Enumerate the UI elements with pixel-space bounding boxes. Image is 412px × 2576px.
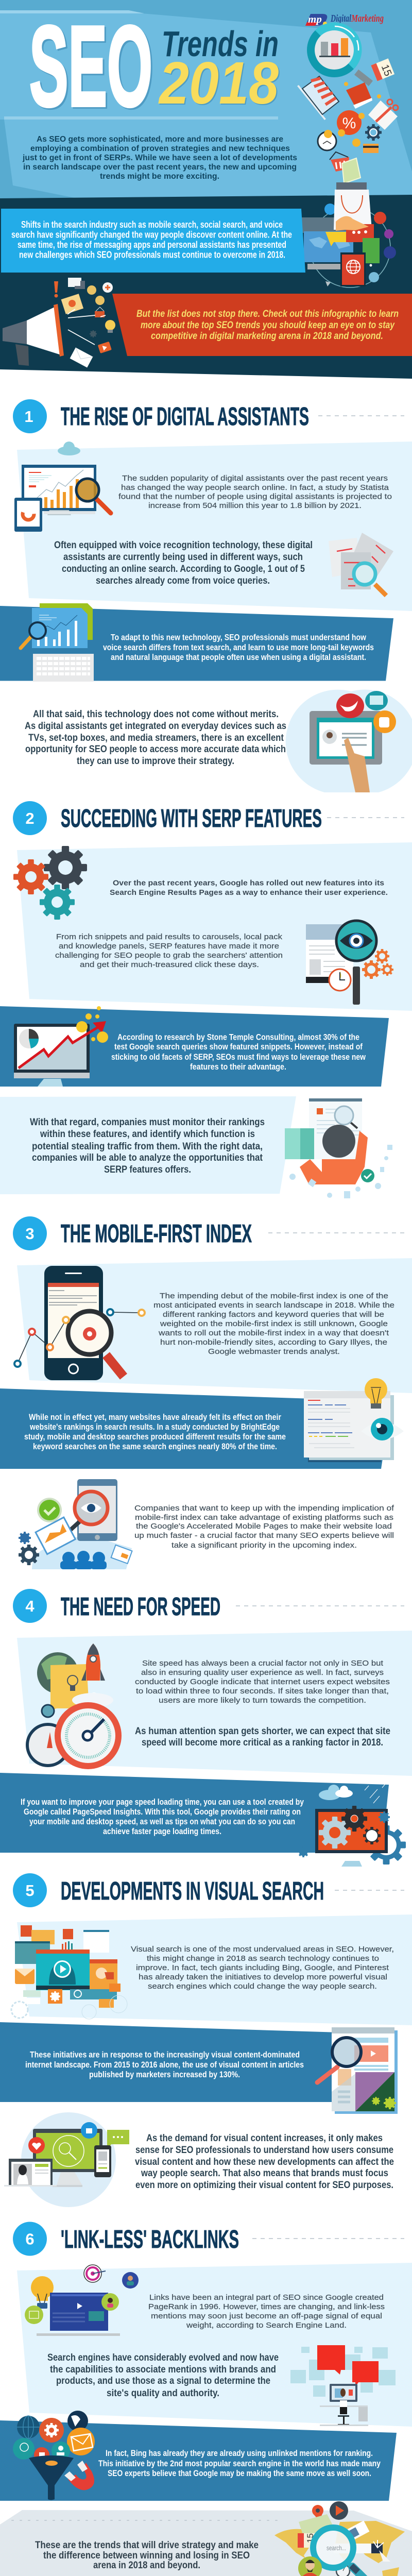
- icon: cloud: [58, 442, 80, 455]
- icon: coins: [87, 285, 105, 305]
- text: voice recognition: assistants are currently being used in different ways, such: [63, 552, 303, 563]
- text: AMP: mobile-first index can take advantage of existing platforms such as: [135, 1513, 393, 1522]
- text: research: According to research by Stone Temple Consulting, almost 30% of the: [117, 1032, 359, 1042]
- icon: coins: [338, 82, 381, 147]
- icon: exclamation: [54, 281, 58, 298]
- icon: red book: [346, 82, 372, 107]
- callout: red teaser: [112, 294, 412, 356]
- band: Bing: [0, 2420, 397, 2501]
- icon: calendar: 15: [379, 63, 393, 78]
- text: rankings effect: keyword searches on the same search engines nearly 80% of the time.: [33, 1442, 277, 1451]
- panel: light blue: [17, 1631, 412, 1776]
- icon: devices with green search: [4, 2112, 129, 2207]
- text: impending debut: most anticipated events in search landscape in 2018. While the: [153, 1301, 394, 1310]
- icon: percent badge: [337, 110, 362, 135]
- icon: analytics monitor: [22, 465, 96, 515]
- icon: monitor with gears: [298, 1782, 406, 1867]
- icon: calendar: [371, 58, 394, 81]
- text: site speed: users are more likely to turn towards the competition.: [159, 1696, 366, 1705]
- band: rankings effect: [0, 1388, 391, 1469]
- title: [29, 3, 279, 130]
- icon: gears: [13, 846, 87, 920]
- text: rankings effect: [24, 1412, 286, 1451]
- text: search engines evolved: [47, 2352, 279, 2399]
- text: initiatives: internet landscape. From 2015 to 2016 alone, the use of visual content in articles: [25, 2060, 304, 2070]
- text: Bing: [98, 2448, 381, 2478]
- text: links: mentions may soon just become an off-page signal of equal: [151, 2312, 382, 2320]
- icon: monitor: [302, 217, 353, 269]
- text: pagespeed: your mobile and desktop speed, as well as tips on what you can do so you can: [29, 1817, 295, 1826]
- text: links: PageRank in 1996. However, times are changing, and link-less: [148, 2302, 385, 2311]
- icon: phone with magnifier and graph: [14, 1266, 145, 1380]
- icon: settings gear: [365, 124, 382, 141]
- text: demand: As the demand for visual content increases, it only makes: [146, 2133, 383, 2144]
- badge 6: 6: [25, 2230, 35, 2248]
- icon: shopping basket: [330, 152, 349, 172]
- text: merits: they can use to improve their strategy.: [77, 756, 234, 767]
- text: these are the trends: These are the trends that will drive strategy and make: [35, 2540, 259, 2551]
- text: popularity: found that the number of people using digital assistants is projected to: [118, 493, 392, 501]
- badge 1: [13, 399, 47, 433]
- text: impending debut: wants to roll out the mobile-first index in a way that doesn't: [158, 1329, 389, 1337]
- icon: megaphone: [3, 304, 64, 366]
- text: AMP: the Google's Accelerated Mobile Pages to make their website load: [136, 1522, 392, 1531]
- panel: shifts in search: [1, 209, 305, 273]
- text: site speed: [135, 1659, 390, 1705]
- icon: folded map: [299, 2514, 334, 2545]
- text: voice recognition: conducting an online search. According to Google, 1 out of 5: [62, 564, 305, 574]
- heading 3: THE MOBILE-FIRST INDEX: [61, 1220, 252, 1248]
- text: research: [111, 1032, 366, 1072]
- panel: light blue: [17, 2263, 412, 2427]
- icon: tablet pie chart: [14, 498, 42, 532]
- heading 6: 'LINK-LESS' BACKLINKS: [61, 2226, 239, 2253]
- text: impending debut: different ranking factors and keyword queries that will be: [163, 1310, 384, 1319]
- icon: credit card: [363, 144, 379, 153]
- text: initiatives: [25, 2049, 304, 2079]
- badge 4: 4: [25, 1597, 35, 1615]
- icon: social circles: [324, 204, 396, 286]
- badge 1: 1: [24, 408, 33, 426]
- text: demand: [135, 2133, 394, 2191]
- icon: play button: [330, 2501, 348, 2520]
- icon: magnifier with bar chart: [307, 22, 371, 83]
- text: monitor rankings: within these features, and identify which function is: [40, 1129, 255, 1140]
- icon: logo top: mp: [308, 13, 322, 25]
- panel: closing grey: [0, 2510, 412, 2576]
- text: rankings effect: While not in effect yet, many websites have already felt its effect on their: [29, 1412, 281, 1422]
- icon: photo: [61, 294, 83, 314]
- text: rich snippets: challenging for SEO people to grab the searchers' attention: [55, 951, 283, 960]
- panel: shifts in search: search have significantly changed the way people discover content online. At the: [11, 230, 292, 240]
- badge 5: 5: [25, 1882, 35, 1900]
- text: rankings effect: study, mobile and desktop searches produced different results for the same: [24, 1432, 286, 1442]
- icon: tablet with hand: [286, 689, 412, 792]
- intro text: trends might be more exciting.: [100, 172, 219, 181]
- text: merits: opportunity for SEO people to access more accurate data which: [25, 744, 286, 755]
- icon: rocket and speedometer: [27, 1643, 118, 1766]
- band: research: [0, 1006, 389, 1087]
- text: AMP: Companies that want to keep up with the impending implication of: [134, 1504, 394, 1513]
- icon: clock: [318, 130, 336, 150]
- icon: map pin: [312, 2505, 323, 2521]
- text: site speed: to load within three to four seconds. If sites take longer than that,: [136, 1687, 389, 1696]
- panel: light blue: [17, 1914, 412, 2025]
- text: these are the trends: [35, 2540, 259, 2571]
- text: visual search: search engines which could change the way people search.: [148, 1982, 377, 1991]
- badge 2: 2: [25, 809, 35, 827]
- icon: book pages: [353, 98, 372, 109]
- band: initiatives: [0, 2022, 340, 2102]
- icon: documents with magnifier: [329, 533, 393, 596]
- text: rankings effect: website's rankings in search results. In a study conducted by BrightEdge: [29, 1422, 280, 1432]
- text: attention span: speed will become more critical as a ranking factor in 2018.: [142, 1737, 383, 1748]
- icon: percent badge: %: [342, 115, 356, 132]
- section 6: link-less backlinks: [0, 2222, 412, 2501]
- icon: person reading with magnifier: [285, 1098, 392, 1198]
- panel: shifts in search: Shifts in the search industry such as mobile search, social search, and voice: [21, 219, 283, 230]
- icon: calendar: [298, 2533, 317, 2548]
- title word SEO: SEO: [29, 3, 152, 130]
- text: research: test Google search queries show featured snippets. However, instead of: [114, 1042, 363, 1052]
- icon: monitor with growth arrow: [14, 1006, 108, 1087]
- icon: magnifier: [76, 479, 111, 513]
- badge 3: 3: [25, 1225, 35, 1243]
- icon: devices and shopping bag: [302, 182, 396, 287]
- text: monitor rankings: companies will be able to analyze the opportunities that: [32, 1153, 263, 1163]
- text: pagespeed: [21, 1797, 304, 1836]
- band: pagespeed: [0, 1773, 389, 1853]
- text: site speed: Site speed has always been a crucial factor not only in SEO but: [142, 1659, 384, 1668]
- header background: [0, 0, 412, 206]
- text: impending debut: weighted on the mobile-first index is still unknown, Google: [160, 1319, 388, 1328]
- text: search engines evolved: Search engines have considerably evolved and now have: [47, 2352, 279, 2363]
- icon: red speech bubble: [346, 224, 374, 246]
- text: popularity: increase from 504 million this year to 1.8 billion by 2021.: [148, 501, 362, 510]
- text: merits: TVs, set-top boxes, and media streamers, there is an excellent: [28, 733, 284, 743]
- icon: large magnifier: search...: [327, 2544, 346, 2552]
- intro text: just to get in front of SERPs. While we have seen a lot of developments: [22, 154, 297, 162]
- dark intro band: [0, 195, 412, 379]
- text: links: [148, 2293, 385, 2330]
- icon: card: [347, 2520, 369, 2541]
- text: pagespeed: If you want to improve your page speed loading time, you can use a tool created by: [21, 1797, 304, 1807]
- text: research: features to their advantage.: [190, 1062, 286, 1072]
- icon: phone eye and users: [19, 1479, 132, 1569]
- icon: report chart and keyboard: [21, 603, 94, 682]
- panel: light blue: [17, 442, 412, 611]
- icon: large magnifier: [313, 2528, 382, 2576]
- text: search engines evolved: products, and use those as a signal to determine the: [56, 2376, 270, 2386]
- badge 3: [13, 1216, 47, 1250]
- icon: results page with bulb and eye: [304, 1378, 404, 1462]
- section 2: SERP features: [0, 801, 412, 1198]
- text: links: weight, according to Search Engine Land.: [186, 2321, 347, 2330]
- text: attention span: [135, 1726, 390, 1748]
- text: pagespeed: achieve faster page loading times.: [103, 1826, 221, 1836]
- text: merits: As digital assistants get integrated on everyday devices such as: [25, 721, 286, 732]
- text: new features: [110, 879, 388, 897]
- text: popularity: has changed the way people search online. In fact, a study by Statista: [121, 483, 389, 492]
- text: these are the trends: the difference between winning and losing in SEO: [43, 2550, 250, 2561]
- text: site speed: conducted by Google indicate that internet users expect websites: [135, 1677, 390, 1686]
- text: adapt: [103, 633, 374, 662]
- text: monitor rankings: With that regard, companies must monitor their rankings: [30, 1117, 265, 1128]
- text: initiatives: published by marketers increased by 130%.: [89, 2070, 240, 2079]
- section 1: digital assistants: [0, 399, 412, 792]
- icon: person at desk with speech bubbles: [290, 2345, 396, 2426]
- text: search engines evolved: site's quality and authority.: [107, 2388, 219, 2399]
- panel: monitor rankings: [0, 1096, 296, 1194]
- text: adapt: To adapt to this new technology, SEO professionals must understand how: [111, 633, 367, 642]
- section 4: need for speed: [0, 1589, 412, 1867]
- text: rich snippets: and knowledge panels, SERP features have made it more: [59, 942, 279, 951]
- section 3: mobile-first index: [0, 1216, 412, 1569]
- intro text: As SEO gets more sophisticated, more and more businesses are: [37, 135, 283, 144]
- text: monitor rankings: [30, 1117, 265, 1175]
- title year 2018: 2018: [158, 49, 279, 116]
- intro text: employing a combination of proven strategies and new techniques: [30, 144, 290, 153]
- text: merits: All that said, this technology does not come without merits.: [33, 709, 279, 720]
- badge 4: [13, 1589, 47, 1623]
- text: voice recognition: [54, 540, 313, 586]
- text: new features: Search Engine Results Pages as a way to enhance their user experience.: [110, 888, 388, 897]
- badge 6: [13, 2222, 47, 2256]
- icon: hand: [336, 216, 369, 231]
- icon: page eye magnifier: [306, 921, 393, 1005]
- panel: light blue: [17, 1258, 412, 1393]
- icon: shopping bag: [334, 182, 372, 230]
- text: voice recognition: searches already come from voice queries.: [96, 575, 270, 586]
- text: impending debut: hurt non-mobile-friendly sites, according to Gary Illyes, the: [160, 1338, 387, 1347]
- icon: man avatar: [298, 2556, 322, 2576]
- icon: yellow speech bubble: [325, 232, 347, 246]
- intro text: [22, 135, 297, 181]
- icon: basket: [95, 307, 105, 317]
- icon: tablet storefront: [297, 76, 339, 120]
- text: popularity: [118, 474, 392, 510]
- panel: shifts in search: new challenges which SEO professionals must continue to overcome in 2018.: [19, 249, 285, 260]
- icon: note bubble: [68, 278, 85, 289]
- icon: content windows collage: [11, 1925, 127, 2019]
- icon: logo top: [305, 13, 384, 26]
- icon: laptop with bulb and target: [25, 2265, 139, 2336]
- text: impending debut: The impending debut of the mobile-first index is one of the: [160, 1292, 388, 1300]
- icon: logo top: Digital: [330, 13, 351, 24]
- text: rich snippets: and get their much-treasured click these days.: [80, 960, 259, 969]
- icon: video card: [98, 342, 112, 353]
- heading 4: THE NEED FOR SPEED: [61, 1593, 220, 1621]
- text: monitor rankings: potential stealing traffic from them. With the right data,: [32, 1141, 263, 1152]
- icon: world map with search magnifier: [274, 2501, 405, 2576]
- icon: funnel and magnet: [13, 2411, 95, 2500]
- text: AMP: [134, 1504, 394, 1550]
- text: impending debut: [153, 1292, 394, 1356]
- text: impending debut: Google webmaster trends analyst.: [208, 1347, 340, 1356]
- title words Trends in: Trends in: [162, 24, 279, 64]
- icon: clock: [336, 2564, 350, 2576]
- icon: megaphone cluster: [3, 278, 115, 368]
- icon: envelope: [70, 347, 93, 368]
- text: visual search: [131, 1945, 394, 1991]
- text: links: Links have been an integral part of SEO since Google created: [149, 2293, 384, 2302]
- text: visual search: improve. In fact, tech giants including Bing, Google, and Pinterest: [136, 1963, 389, 1972]
- icon: search bar: [334, 2540, 390, 2562]
- section 5: visual search: [0, 1873, 412, 2207]
- icon: red tablet with globe: [340, 252, 366, 286]
- icon: web page with magnifier: [317, 2027, 398, 2114]
- text: rich snippets: [55, 933, 283, 969]
- text: popularity: The sudden popularity of digital assistants over the past recent years: [122, 474, 388, 483]
- icon: green phone: [363, 238, 380, 267]
- icon: bulb: [105, 320, 115, 333]
- icon: plus badge: [102, 282, 113, 293]
- icon: calendar: 15: [305, 2533, 315, 2543]
- badge 5: [13, 1873, 47, 1907]
- text: visual search: this might change in 2018 as search technology continues to: [147, 1954, 379, 1963]
- text: search engines evolved: the capabilities to associate mentions with brands and: [50, 2364, 276, 2375]
- text: visual search: has already taken the initiatives to develop more powerful visual: [139, 1973, 387, 1981]
- band: adapt: [0, 606, 393, 681]
- intro text: in search landscape over the past recent years, the new and upcoming: [23, 163, 297, 172]
- text: AMP: take a significant priority in the upcoming index.: [171, 1541, 357, 1550]
- text: voice recognition: Often equipped with voice recognition technology, these digital: [54, 540, 313, 551]
- text: these are the trends: arena in 2018 and beyond.: [93, 2560, 200, 2571]
- icon: folded map: [342, 158, 360, 183]
- rays: [67, 309, 106, 345]
- panel: shifts in search: same time, the rise of messaging apps and personal assistants has presented: [18, 240, 286, 250]
- icon: gift box: [368, 99, 398, 130]
- text: adapt: and natural language that people often use when using a digital assistant.: [111, 652, 366, 662]
- badge 2: [13, 801, 47, 835]
- icon: falling ecommerce items: [297, 22, 398, 183]
- icon: small gear: [90, 330, 97, 337]
- text: initiatives: These initiatives are in response to the increasingly visual content-dominated: [30, 2049, 300, 2060]
- world map: [274, 2521, 405, 2576]
- text: site speed: also in ensuring quality user experience as well. In fact, surveys: [141, 1668, 384, 1677]
- text: new features: Over the past recent years, Google has rolled out new features into its: [113, 879, 384, 887]
- text: rich snippets: From rich snippets and paid results to carousels, local pack: [56, 933, 283, 941]
- text: merits: [25, 709, 286, 767]
- text: pagespeed: Google called PageSpeed Insights. With this tool, Google provides their rating on: [24, 1807, 301, 1817]
- text: visual search: Visual search is one of the most undervalued areas in SEO. However,: [131, 1945, 394, 1954]
- icon: logo top: Marketing: [351, 13, 384, 24]
- text: AMP: up much faster - a crucial factor that many SEO experts believe will: [134, 1531, 394, 1540]
- panel: light blue: [17, 842, 412, 1011]
- text: monitor rankings: SERP features offers.: [104, 1164, 191, 1175]
